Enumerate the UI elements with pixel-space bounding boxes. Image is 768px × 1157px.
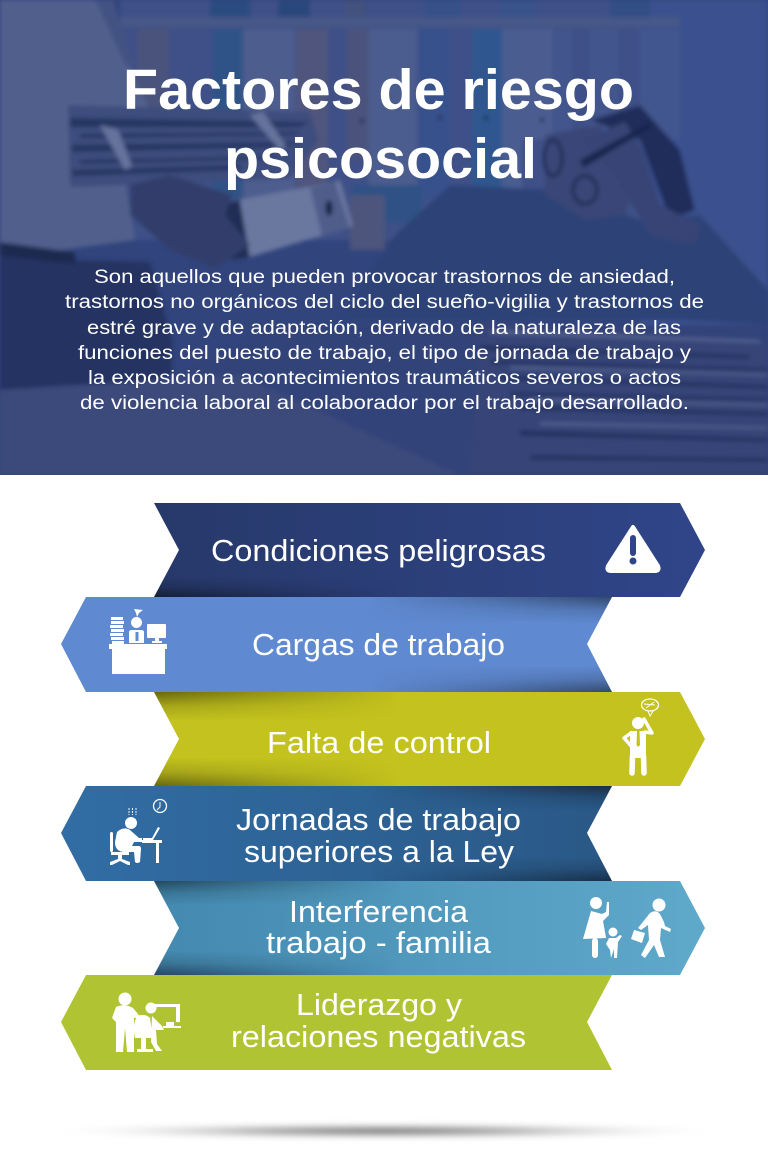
intro paragraph [65,267,704,414]
ribbon 3: Falta de control [150,692,705,786]
intro paragraph: funciones del puesto de trabajo, el tipo de jornada de trabajo y [78,343,692,364]
intro paragraph: Son aquellos que pueden provocar trastornos de ansiedad, [94,267,675,288]
ribbon 4: Jornadas de trabajo superiores a la Ley: Jornadas de trabajo [236,802,521,837]
ribbon 2: Cargas de trabajo: Cargas de trabajo [252,627,505,662]
icon: warning triangle [607,527,659,571]
ribbon 4: Jornadas de trabajo superiores a la Ley [61,786,620,881]
ribbon 6: Liderazgo y relaciones negativas: relaciones negativas [231,1019,526,1054]
ribbon 3: Falta de control: Falta de control [267,725,491,760]
icon: stressed man [624,699,658,773]
title: Factores de riesgo [123,58,634,122]
panel: hero photo background [0,0,768,475]
intro paragraph: trastornos no orgánicos del ciclo del sueño-vigilia y trastornos de [65,292,704,313]
ribbon 5: Interferencia trabajo - familia: trabajo - familia [266,925,492,960]
icon: family and man leaving with briefcase [583,897,671,958]
icon: worker at laptop with clock [110,800,166,865]
ribbon 2: Cargas de trabajo [61,597,620,692]
ribbon 6: Liderazgo y relaciones negativas [61,975,612,1070]
ribbon 4: Jornadas de trabajo superiores a la Ley: superiores a la Ley [244,834,515,869]
floor shadow [34,1122,734,1140]
icon: worker at desk with paper stack [109,609,167,674]
ribbon 1: Condiciones peligrosas: Condiciones peligrosas [211,533,546,568]
ribbon 6: Liderazgo y relaciones negativas: Liderazgo y [296,987,463,1022]
intro paragraph: la exposición a acontecimientos traumáticos severos o actos [88,368,681,389]
title [123,58,634,191]
ribbon 5: Interferencia trabajo - familia: Interferencia [289,894,469,929]
ribbon 5: Interferencia trabajo - familia [150,881,705,975]
icon: leader and seated employee [112,992,181,1052]
ribbon 1: Condiciones peligrosas [150,503,705,597]
intro paragraph: estré grave y de adaptación, derivado de la naturaleza de las [87,318,681,339]
title: psicosocial [224,127,537,191]
intro paragraph: de violencia laboral al colaborador por el trabajo desarrollado. [80,393,689,414]
